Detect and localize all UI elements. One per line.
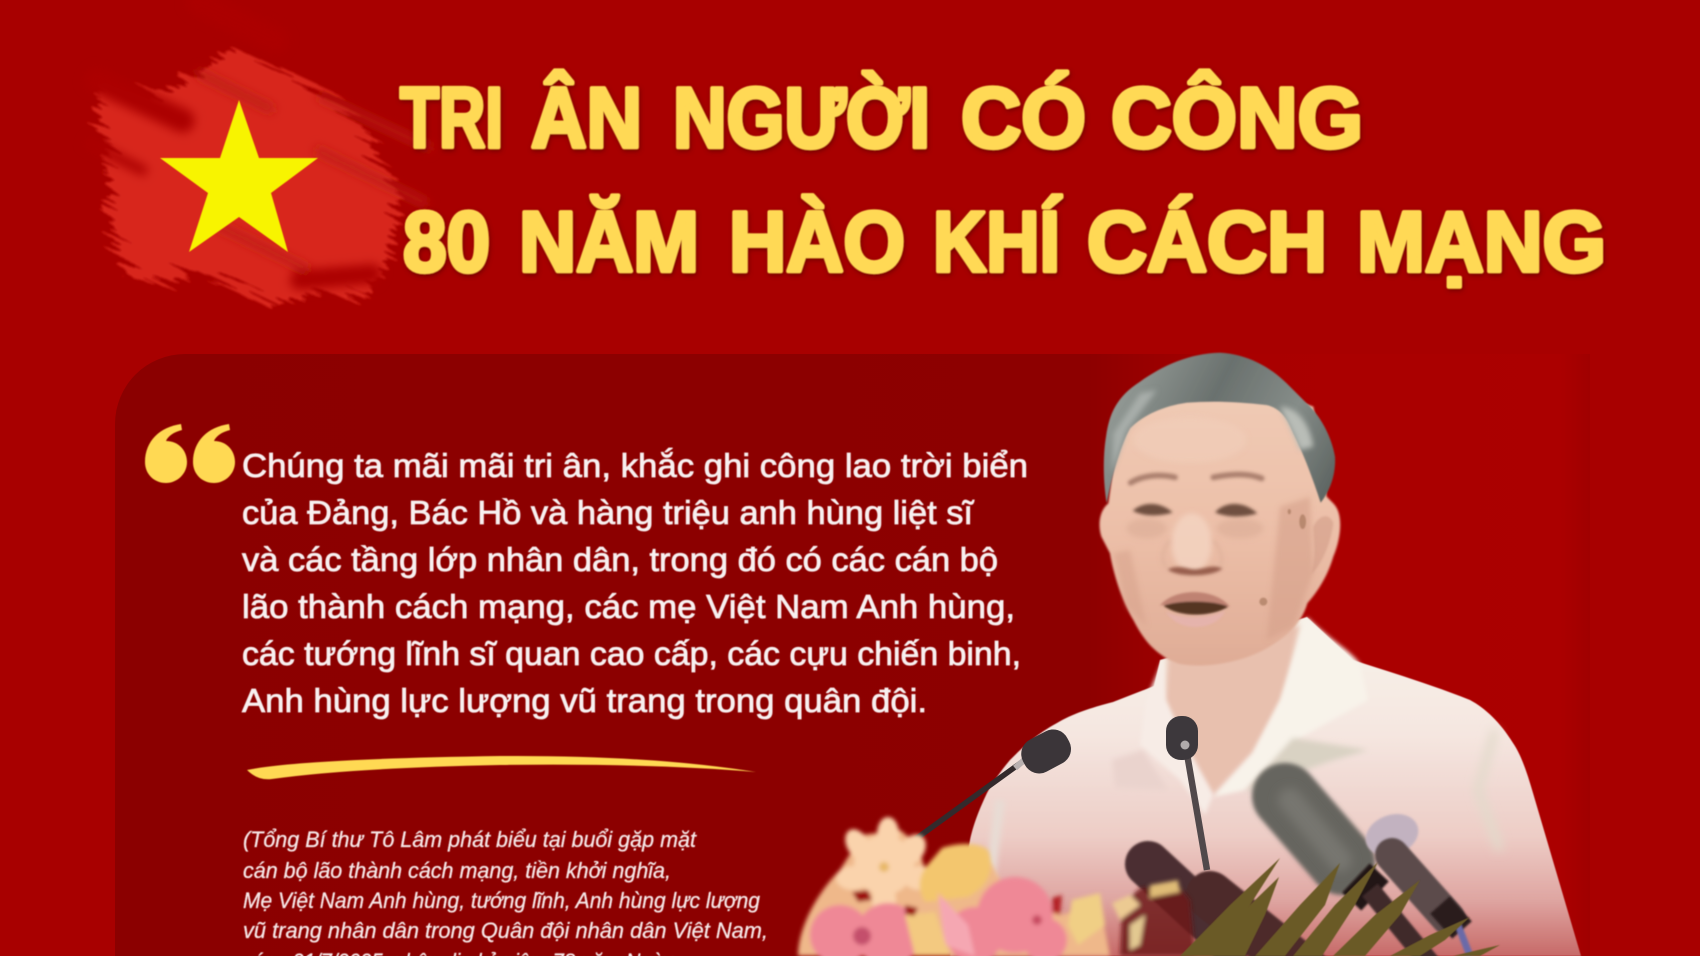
orange flower xyxy=(905,912,950,956)
face xyxy=(1100,373,1340,665)
quote text: của Đảng, Bác Hồ và hàng triệu anh hùng liệt sĩ xyxy=(242,495,975,532)
skin spots xyxy=(1259,509,1306,606)
title line 2: NĂM xyxy=(519,195,699,290)
microphone: furry wind cover xyxy=(1285,796,1440,956)
face shading xyxy=(1113,417,1313,640)
attribution text xyxy=(243,827,768,956)
panel: quote background xyxy=(115,354,1590,956)
icon: brushed Vietnamese flag xyxy=(0,0,498,421)
attribution text: (Tổng Bí thư Tô Lâm phát biểu tại buổi gặp mặt xyxy=(243,827,697,852)
mouth xyxy=(1160,592,1230,627)
yellow flower xyxy=(920,844,991,902)
pink flowers xyxy=(810,877,1067,956)
microphone: dark foam xyxy=(1148,864,1310,956)
microphone: left gooseneck xyxy=(917,724,1077,838)
eyes xyxy=(1133,504,1257,516)
title line 1: NGƯỜI xyxy=(673,71,930,166)
title xyxy=(400,70,1606,290)
title line 1: ÂN xyxy=(531,70,642,166)
quote text xyxy=(242,447,1028,720)
palm leaves xyxy=(1180,858,1500,956)
title line 2 xyxy=(403,195,1606,290)
icon: yellow star xyxy=(160,100,318,252)
title line 2: MẠNG xyxy=(1357,195,1606,290)
small yellow flowers xyxy=(1068,893,1105,945)
nose xyxy=(1163,540,1223,575)
title line 2: KHÍ xyxy=(933,195,1062,290)
quote text: và các tầng lớp nhân dân, trong đó có các cán bộ xyxy=(242,542,998,579)
quote text: các tướng lĩnh sĩ quan cao cấp, các cựu chiến binh, xyxy=(242,636,1021,673)
flowers xyxy=(798,817,1195,956)
attribution text: vũ trang nhân dân trong Quân đội nhân dân Việt Nam, xyxy=(243,918,768,943)
title line 1: TRI xyxy=(400,71,503,166)
shirt xyxy=(950,617,1581,956)
quote text: Chúng ta mãi mãi tri ân, khắc ghi công lao trời biển xyxy=(242,447,1028,485)
hair xyxy=(1104,353,1335,503)
quote text: Anh hùng lực lượng vũ trang trong quân đội. xyxy=(242,683,927,720)
attribution text: cán bộ lão thành cách mạng, tiền khởi nghĩa, xyxy=(243,858,671,883)
microphone: handheld mesh xyxy=(1360,807,1470,956)
title line 1 xyxy=(400,70,1363,166)
dark foliage behind flowers xyxy=(1120,885,1195,956)
flower base xyxy=(798,830,1110,956)
gaps showing red xyxy=(852,890,872,902)
attribution text: Mẹ Việt Nam Anh hùng, tướng lĩnh, Anh hùng lực lượng xyxy=(243,888,761,913)
title line 2: HÀO xyxy=(729,195,905,290)
title line 2: 80 xyxy=(403,195,490,290)
peach flower xyxy=(836,817,937,917)
divider brush stroke xyxy=(247,756,756,779)
portrait: speaker at microphones xyxy=(798,353,1581,956)
collar shadow xyxy=(1245,738,1368,792)
hair highlight xyxy=(1280,407,1313,450)
microphone: center gooseneck xyxy=(1166,716,1207,870)
title line 1: CÓ xyxy=(961,71,1086,166)
title line 1: CÔNG xyxy=(1111,70,1363,166)
icon: opening quotation mark xyxy=(145,424,235,483)
quote text: lão thành cách mạng, các mẹ Việt Nam Anh hùng, xyxy=(242,589,1015,626)
eyebrows xyxy=(1131,474,1262,483)
title line 2: CÁCH xyxy=(1087,195,1327,290)
ear inner shading xyxy=(1312,516,1333,573)
shirt neck skin xyxy=(1165,625,1300,795)
head xyxy=(1100,353,1340,665)
collar flaps xyxy=(1213,617,1368,797)
